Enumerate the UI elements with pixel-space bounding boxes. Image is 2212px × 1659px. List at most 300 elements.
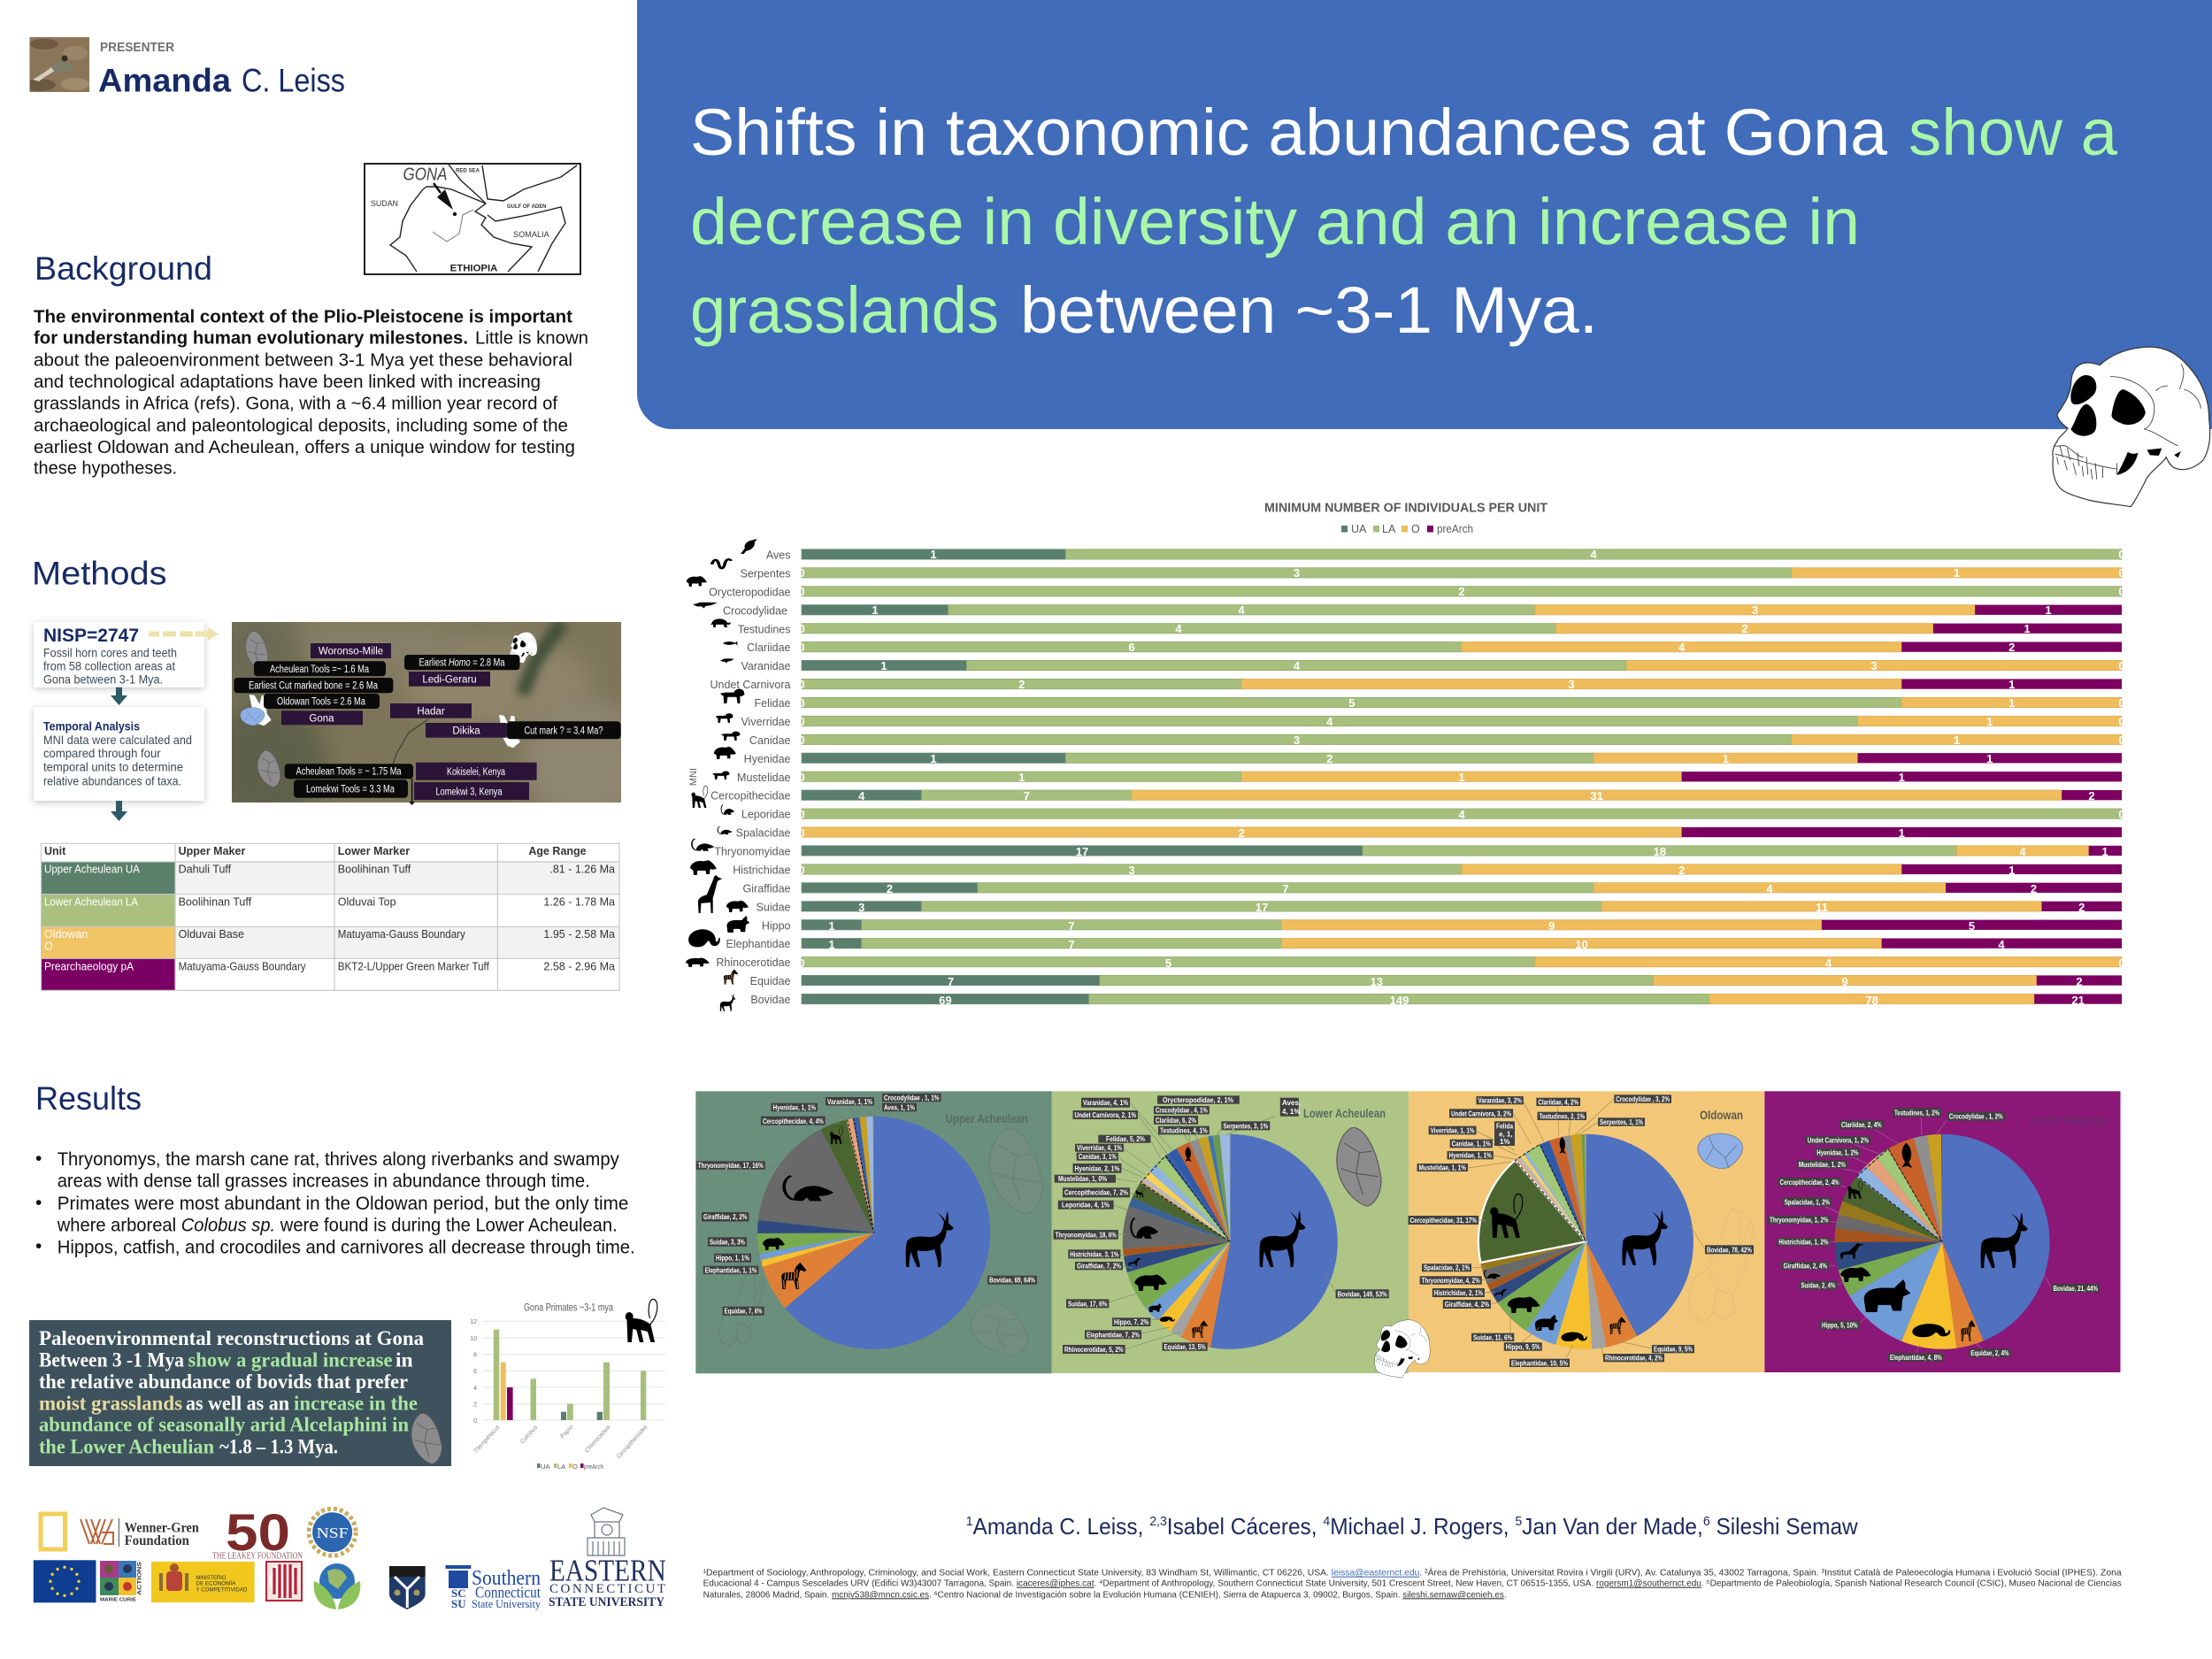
data labels: Crocodylidae , 1, 2%	[1949, 1113, 2003, 1121]
logo: Leakey Foundation 50: 50	[226, 1504, 290, 1562]
callout: paleoenvironmental reconstructions: the relative abundance of bovids that prefer	[39, 1371, 408, 1393]
table rows: Boolihinan Tuff	[338, 864, 411, 876]
table header: Lower Marker	[338, 845, 410, 857]
heading: Results: Results	[35, 1080, 142, 1117]
data labels: Elephantidae, 1, 1%	[705, 1267, 757, 1274]
bar chart: Gona primates: 4	[473, 1386, 477, 1392]
bar: Viverridae: 0	[2118, 715, 2125, 728]
axis label MNI: MNI	[688, 768, 699, 786]
bar: Spalacidae: 1	[1899, 826, 1905, 840]
logo: Leakey Foundation 50	[212, 1504, 303, 1562]
background text: archaeological and paleontological deposits, including some of the	[34, 416, 568, 435]
site and date labels	[234, 643, 621, 800]
bar chart: Gona primates: 12	[470, 1319, 477, 1325]
pie slices	[1888, 1188, 1996, 1295]
bar: Viverridae: 4	[1326, 715, 1333, 728]
logo: Marie Curie Actions: ACTIONS	[138, 1562, 143, 1595]
stone tool	[1337, 1127, 1381, 1206]
bar: Undet Carnivora: 0	[798, 678, 805, 691]
bar: Undet Carnivora: 2	[1018, 678, 1025, 691]
card: temporal analysis: compared through four	[43, 746, 161, 760]
site and date labels: Cut mark ? = 3.4 Ma?	[524, 726, 603, 736]
table rows: Lower Acheulean LA	[44, 895, 139, 908]
bar: Undet Carnivora	[710, 678, 2122, 691]
affiliations: ¹Department of Sociology, Anthropology, Criminology, and Social Work, Eastern Connecticut State University, 83 Windham St, Willimantic, CT 06226, USA. leissa@easternct.edu. ²Área de Prehistòria, Universitat Rovira i Virgili (URV), Av. Catalunya 35, 43002 Tarragona, Spain. ³Institut Català de Paleoecologia Humana i Evolució Social (IPHES). Zona	[703, 1567, 2122, 1578]
data labels: Elephantidae, 4, 8%	[1890, 1354, 1942, 1362]
presenter block: PRESENTER	[100, 40, 174, 55]
card: temporal analysis: relative abundances of taxa.	[43, 773, 181, 787]
data labels: Hyenidae, 1, 2%	[1816, 1148, 1858, 1156]
bar: Felidae: 0	[2118, 696, 2125, 710]
bar: Canidae: 0	[798, 733, 805, 747]
data labels: Aves,	[1282, 1099, 1301, 1107]
data labels: Bovidae, 21, 44%	[2053, 1285, 2098, 1293]
data labels: Felida	[1496, 1122, 1513, 1131]
icon: monkey	[626, 1299, 657, 1342]
data labels: Histrichidae, 1, 2%	[1778, 1239, 1829, 1247]
bar: Crocodylidae: Crocodylidae	[723, 604, 787, 617]
data labels: Bovidae, 69, 64%	[989, 1277, 1035, 1285]
bar: Suidae: 11	[1816, 901, 1828, 914]
bar: Mustelidae: 1	[1458, 771, 1465, 784]
bar: Giraffidae: 2	[887, 882, 893, 895]
bar: Bovidae: 78	[1865, 994, 1878, 1007]
icon: skull between pies	[1375, 1320, 1430, 1378]
bar: Suidae: 2	[2078, 901, 2085, 914]
bar: Canidae	[749, 733, 2125, 747]
data labels: Canidae, 3, 1%	[1079, 1153, 1117, 1161]
site and date labels: Acheulean Tools = ~ 1.75 Ma	[296, 767, 402, 778]
results bullet list: where arboreal Colobus sp. were found is during the Lower Acheulean.	[57, 1216, 618, 1236]
bar: Equidae: 9	[1841, 975, 1848, 988]
card: temporal analysis	[34, 707, 204, 801]
map of Ethiopia showing Gona: GONA	[403, 165, 448, 185]
map of Ethiopia showing Gona: RED SEA	[456, 168, 480, 174]
bar: Orycteropodidae	[709, 585, 2125, 598]
data labels: Giraffidae, 4, 2%	[1445, 1301, 1489, 1309]
pie icons	[1840, 1143, 2028, 1341]
data labels: 4, 1%	[1282, 1108, 1300, 1116]
bar: Rhinocerotidae: 4	[1825, 956, 1832, 970]
bar: Testudines: 4	[1175, 622, 1182, 635]
card: NISP: NISP=2747	[43, 626, 139, 646]
data labels: Cercopithecidae, 31, 17%	[1410, 1217, 1477, 1225]
bar: Equidae: 7	[948, 975, 954, 988]
heading: Background: Background	[35, 250, 212, 287]
bar: Hyenidae: 1	[1723, 752, 1729, 765]
data labels: Bovidae, 78, 42%	[1707, 1246, 1752, 1254]
results bullet list: •	[35, 1236, 42, 1256]
bar: Rhinocerotidae: 0	[2118, 956, 2125, 970]
data labels: Hyenidae, 2, 1%	[1074, 1164, 1119, 1172]
logo: Ministerio de Economia: MINISTERIO	[196, 1575, 226, 1581]
pie slices	[1532, 1188, 1640, 1295]
pie icons	[1484, 1137, 1668, 1341]
stone tools and bones on map	[240, 631, 537, 787]
data labels: Hippo, 5, 10%	[1822, 1322, 1858, 1330]
panel: Oldowan pie	[1409, 1091, 1764, 1372]
logo: shield	[389, 1566, 426, 1609]
data labels: Equidae, 9, 5%	[1654, 1346, 1693, 1354]
bar: Histrichidae: 0	[798, 864, 805, 877]
arrow: dashed to satellite map	[149, 627, 219, 641]
bar: Equidae	[750, 975, 2122, 988]
data labels: Rhinocerotidae, 5, 2%	[1064, 1346, 1124, 1354]
bar: Canidae: 3	[1294, 733, 1300, 747]
data labels: Undet Carnivora, 1, 2%	[1808, 1137, 1869, 1145]
decorative stone tools	[972, 1128, 1042, 1356]
data labels: Mustelidae, 1, 2%	[1799, 1161, 1846, 1169]
data labels: Mustelidae, 1, 0%	[1058, 1175, 1107, 1183]
data labels: Undet Carnivora, 2, 1%	[1074, 1111, 1136, 1119]
bar chart: Gona primates: Gona Primates ~3-1 mya	[524, 1302, 613, 1314]
data labels: Cercopithecidae, 4, 4%	[763, 1118, 824, 1125]
affiliations	[703, 1567, 2122, 1600]
results bullet list: Thryonomys, the marsh cane rat, thrives along riverbanks and swampy	[58, 1149, 619, 1170]
bar: Elephantidae	[726, 938, 2122, 951]
bar: Varanidae: Varanidae	[741, 660, 791, 672]
bar: Mustelidae	[737, 771, 2122, 784]
logo: National Geographic	[41, 1514, 65, 1549]
bar: Giraffidae: 4	[1766, 882, 1773, 895]
author list: Jan Van der Made,	[1522, 1513, 1703, 1540]
card: temporal analysis: MNI data were calculated and	[43, 733, 192, 747]
data labels	[696, 1094, 1037, 1316]
bar: Histrichidae: 1	[2008, 864, 2015, 877]
results bullet list: Primates were most abundant in the Oldowan period, but the only time	[58, 1194, 628, 1214]
bar: Leporidae	[741, 808, 2125, 821]
table header: Unit	[44, 845, 66, 857]
bar: Mustelidae: Mustelidae	[737, 772, 791, 784]
bar: Leporidae: 0	[798, 808, 805, 821]
site and date labels: Earliest Homo = 2.8 Ma	[419, 658, 505, 669]
results bullet list: Hippos, catfish, and crocodiles and carnivores all decrease through time.	[58, 1238, 635, 1258]
bar: Suidae	[757, 901, 2122, 914]
data labels: Histrichidae, 2, 1%	[1434, 1289, 1483, 1297]
card: temporal analysis: Temporal Analysis	[43, 719, 140, 733]
title line 2: decrease in diversity and an increase in	[690, 185, 1860, 258]
panel: Upper Acheulean pie	[695, 1091, 1051, 1373]
site and date labels: Gona	[309, 713, 334, 724]
background text: for understanding human evolutionary milestones.	[34, 329, 468, 349]
bar: Viverridae	[741, 715, 2125, 728]
logo: NSF	[309, 1509, 356, 1555]
bar: Varanidae: 0	[2118, 659, 2125, 672]
data labels: Suidae, 11, 6%	[1473, 1333, 1512, 1341]
table rows: Olduvai Base	[179, 928, 244, 941]
results bullet list	[35, 1148, 635, 1258]
primate chart legend: preArch	[584, 1463, 603, 1471]
callout: paleoenvironmental reconstructions: in	[396, 1348, 413, 1371]
bar: Varanidae	[741, 659, 2125, 672]
bar: Elephantidae: 7	[1068, 938, 1075, 951]
logo: Wenner-Gren Foundation: Wenner-Gren	[125, 1521, 199, 1536]
bar: Spalacidae	[736, 826, 2122, 840]
background text	[34, 307, 588, 479]
decorative bones and stone	[1688, 1133, 1754, 1322]
site and date labels: Woronso-Mille	[319, 646, 383, 657]
bar: Suidae: 3	[858, 901, 864, 914]
logo: Eastern Connecticut State University: STATE UNIVERSITY	[549, 1595, 664, 1609]
bar: Bovidae: 21	[2071, 994, 2085, 1007]
site and date labels: Lomekwi Tools = 3.3 Ma	[306, 784, 395, 795]
author list: Sileshi Semaw	[1710, 1513, 1858, 1540]
bar: Aves	[766, 548, 2125, 561]
results bullet list: •	[35, 1148, 42, 1169]
logo: NSF: NSF	[317, 1525, 349, 1541]
site and date labels: Kokiselei, Kenya	[447, 767, 505, 778]
bar: Equidae: Equidae	[750, 975, 791, 987]
logo: Eastern Connecticut State University: CONNECTICUT	[549, 1582, 665, 1596]
logo: Generalitat de Catalunya	[266, 1562, 302, 1601]
table header: Upper Maker	[179, 845, 245, 857]
background text: these hypotheses.	[34, 459, 177, 479]
data labels: Varanidae, 4, 1%	[1083, 1099, 1128, 1107]
bar: Undet Carnivora: 3	[1568, 678, 1575, 691]
bar: Varanidae: 3	[1870, 659, 1878, 672]
bar: Suidae: Suidae	[757, 901, 791, 913]
pie icons	[1128, 1147, 1306, 1338]
bar chart: Gona primates: 10	[470, 1336, 477, 1342]
background text: Little is known	[475, 329, 588, 349]
bar: Felidae	[754, 696, 2125, 710]
logo: Eastern Connecticut State University: EASTERN	[549, 1554, 666, 1588]
data labels: Bovidae, 149, 53%	[1338, 1290, 1387, 1298]
logo: Southern Connecticut State University: SC	[451, 1586, 466, 1600]
pie slices	[816, 1175, 932, 1291]
bar: Canidae: Canidae	[749, 734, 791, 747]
author list: Michael J. Rogers,	[1330, 1513, 1515, 1540]
logo: globe and leaves	[314, 1563, 360, 1609]
bar: Crocodylidae: 1	[872, 603, 879, 617]
data labels: Cercopithecidae, 7, 2%	[1064, 1189, 1128, 1197]
bar: Histrichidae: 2	[1678, 864, 1685, 877]
table rows: 1.26 - 1.78 Ma	[543, 895, 615, 908]
author list: 4	[1323, 1514, 1330, 1529]
data labels: Suidae, 3, 3%	[710, 1239, 745, 1246]
data labels: Hyenidae, 1, 1%	[1449, 1152, 1492, 1160]
bar: Crocodylidae: 3	[1752, 603, 1758, 617]
logo: Southern Connecticut State University: Southern	[472, 1567, 541, 1590]
results bullet list: •	[35, 1193, 42, 1213]
data labels: Crocodylidae , 3, 2%	[1616, 1095, 1670, 1103]
data labels: Hippo, 1, 1%	[716, 1255, 749, 1263]
primate chart legend	[537, 1463, 603, 1471]
author list: 2,3	[1149, 1514, 1167, 1529]
bar: Elephantidae: Elephantidae	[726, 938, 791, 950]
presenter photo	[24, 37, 89, 92]
logo: Southern Connecticut State University: State University	[472, 1597, 541, 1610]
card: NISP: from 58 collection areas at	[43, 659, 175, 673]
taxon axis labels: Theropithecus	[473, 1424, 502, 1455]
bar: Aves: 0	[2118, 548, 2125, 561]
data labels: Crocodylidae , 4, 1%	[1156, 1107, 1208, 1115]
bar: Cercopithecidae: 7	[1024, 789, 1030, 803]
bar: Leporidae: 0	[2118, 808, 2125, 821]
bar: Histrichidae: 3	[1128, 864, 1135, 877]
bar: Suidae: 17	[1256, 901, 1268, 914]
chart title: MINIMUM NUMBER OF INDIVIDUALS PER UNIT	[1264, 502, 1548, 516]
bar: Hippo	[762, 919, 2122, 933]
map of Ethiopia showing Gona	[365, 164, 580, 274]
callout: paleoenvironmental reconstructions: abundance of seasonally arid Alcelaphini in	[39, 1413, 409, 1435]
chart legend	[1341, 523, 1473, 535]
bar: Serpentes: 0	[798, 566, 805, 580]
bar: Giraffidae: 7	[1282, 882, 1289, 895]
data labels: Equidae, 7, 6%	[725, 1308, 763, 1316]
site and date labels: Dikika	[452, 726, 480, 736]
data labels: Undet Carnivora, 3, 2%	[1451, 1110, 1511, 1118]
bar: Serpentes: 3	[1294, 566, 1300, 580]
chart legend: LA	[1382, 523, 1396, 535]
author list: Isabel Cáceres,	[1167, 1513, 1323, 1540]
bar: Crocodylidae: 4	[1238, 603, 1245, 617]
data labels: Testudines, 1, 2%	[1894, 1109, 1939, 1117]
bar: Thryonomyidae: 17	[1076, 845, 1088, 858]
data labels: Histrichidae, 3, 1%	[1070, 1250, 1118, 1258]
bar: Giraffidae: 2	[2031, 882, 2037, 895]
bar: Clariidae: Clariidae	[747, 641, 791, 654]
chart legend: O	[1411, 523, 1420, 535]
bar: Mustelidae: 1	[1899, 771, 1905, 784]
logo: Southern Connecticut State University: Connecticut	[475, 1584, 541, 1601]
data labels: Clariidae, 2, 4%	[1841, 1121, 1882, 1129]
bar: Testudines: 0	[798, 622, 805, 635]
sponsor logos	[34, 1504, 666, 1610]
primate bars	[494, 1330, 646, 1420]
data labels: Giraffidae, 7, 2%	[1077, 1263, 1121, 1271]
table rows: Matuyama-Gauss Boundary	[179, 961, 306, 973]
primate chart legend: O	[572, 1463, 578, 1471]
bar: Cercopithecidae: 4	[858, 789, 865, 803]
data labels: Thryonomyidae, 18, 6%	[1056, 1231, 1117, 1239]
presenter name	[98, 63, 345, 99]
heading: Methods: Methods	[32, 556, 166, 592]
data labels: Thryonomyidae, 17, 16%	[698, 1162, 764, 1170]
data labels: Serpentes, 1, 1%	[1600, 1118, 1643, 1126]
background text: grasslands in Africa (refs). Gona, with a ~6.4 million year record of	[34, 395, 557, 414]
bar: Thryonomyidae: Thryonomyidae	[714, 846, 791, 858]
callout: paleoenvironmental reconstructions: increase in the	[294, 1392, 418, 1414]
title line 3: between ~3-1 Mya.	[1020, 273, 1598, 347]
table rows: Boolihinan Tuff	[179, 895, 252, 908]
bar: Spalacidae: Spalacidae	[736, 827, 791, 840]
bar chart: Gona primates: 6	[473, 1369, 477, 1375]
bar chart: Gona primates	[470, 1299, 665, 1471]
logo: Ministerio de Economia	[151, 1562, 255, 1602]
table: stratigraphic units	[41, 843, 619, 990]
bar: Equidae: 2	[2076, 975, 2083, 988]
card: temporal analysis: temporal units to determine	[43, 760, 183, 774]
data labels: Aves, 1, 1%	[884, 1104, 915, 1111]
bar: Serpentes: 1	[1954, 566, 1960, 580]
card: NISP: Gona between 3-1 Mya.	[43, 672, 163, 687]
pie slices	[1177, 1188, 1284, 1295]
background text: The environmental context of the Plio-Pleistocene is important	[34, 307, 572, 326]
bar: Undet Carnivora: 1	[2008, 678, 2015, 691]
bar: Mustelidae: 0	[798, 771, 805, 784]
logo: Leakey Foundation 50: THE LEAKEY FOUNDATION	[212, 1552, 303, 1562]
data labels: Varanidae, 3, 2%	[1478, 1097, 1522, 1105]
site and date labels: Ledi-Geraru	[422, 674, 477, 685]
site and date labels: Earliest Cut marked bone = 2.6 Ma	[249, 681, 378, 692]
data labels: e, 1,	[1499, 1131, 1513, 1138]
bar: Bovidae: 69	[939, 994, 952, 1007]
bar: Hyenidae: 1	[1986, 752, 1993, 765]
bar: Crocodylidae	[723, 603, 2122, 617]
bar: Cercopithecidae: 31	[1590, 789, 1603, 803]
bar: Histrichidae	[733, 864, 2122, 877]
results bullet list: areas with dense tall grasses increases in abundance through time.	[58, 1171, 590, 1192]
bar: Thryonomyidae: 4	[2019, 845, 2026, 858]
data labels: Elephantidae, 10, 5%	[1511, 1359, 1568, 1367]
bar: Clariidae: 2	[2008, 641, 2015, 654]
taxon silhouette icons	[686, 539, 757, 1011]
logo: Wenner-Gren Foundation	[81, 1518, 199, 1548]
bar: Aves: Aves	[766, 549, 791, 561]
bar: Orycteropodidae: 0	[2118, 585, 2125, 598]
bar: Hyenidae: 2	[1326, 752, 1333, 765]
logo: Ministerio de Economia: Y COMPETITIVIDAD	[196, 1586, 248, 1593]
data labels: Spalacidae, 1, 2%	[1785, 1198, 1830, 1206]
bar: Hyenidae	[744, 752, 2122, 765]
table rows: .81 - 1.26 Ma	[549, 864, 615, 876]
data labels: Viverridae, 4, 1%	[1077, 1144, 1122, 1152]
title line 3	[690, 273, 1598, 347]
bar chart: Gona primates: 8	[473, 1352, 477, 1359]
arrow: down to temporal analysis	[111, 687, 127, 705]
bar: Bovidae: 149	[1390, 994, 1409, 1007]
table rows	[44, 864, 615, 973]
bar: Clariidae: 4	[1678, 641, 1686, 654]
data labels	[1409, 1094, 1754, 1367]
callout: paleoenvironmental reconstructions: Paleoenvironmental reconstructions at Gona	[39, 1327, 424, 1349]
bar: Testudines: 2	[1741, 622, 1748, 635]
site and date labels: Lomekwi 3, Kenya	[435, 787, 503, 798]
data labels: Varanidae, 1, 1%	[827, 1098, 872, 1106]
presenter block	[30, 37, 344, 92]
site and date labels: Oldowan Tools = 2.6 Ma	[277, 696, 365, 707]
pie icons	[763, 1127, 954, 1289]
bar: Undet Carnivora: Undet Carnivora	[710, 679, 791, 691]
logo: Eastern Connecticut State University	[549, 1508, 666, 1609]
background text: about the paleoenvironment between 3-1 Mya yet these behavioral	[34, 351, 572, 371]
affiliations: Educacional 4 - Campus Sescelades URV (Edifici W3)43007 Tarragona, Spain. icaceres@iphes.cat. ⁴Department of Anthropology, Southern Connecticut State University, 501 Crescent Street, New Haven, CT 06515-1355, USA. rogersm1@southernct.edu. ⁵Departmento de Paleobiología, Spanish National Research Council (CSIC), Museo Nacional de Ciencias	[703, 1578, 2122, 1589]
taxon axis labels: Papio	[559, 1425, 575, 1440]
satellite map with site labels	[232, 622, 621, 805]
data labels: Elephantidae, 7, 2%	[1087, 1331, 1140, 1339]
bar: Clariidae: 0	[798, 641, 805, 654]
callout: paleoenvironmental reconstructions: show a gradual increase	[188, 1348, 393, 1371]
data labels: Testudines, 4, 1%	[1160, 1127, 1208, 1134]
callout: paleoenvironmental reconstructions: as well as an	[186, 1392, 289, 1414]
data labels: Cercopithecidae, 2, 4%	[1780, 1179, 1839, 1187]
title line 3: grasslands	[690, 273, 999, 347]
table rows: 2.58 - 2.96 Ma	[543, 961, 615, 973]
bar: Felidae: Felidae	[754, 697, 791, 710]
bar: Elephantidae: 1	[828, 938, 835, 951]
bar: Canidae: 1	[1954, 733, 1960, 747]
map of Ethiopia showing Gona: GULF OF ADEN	[507, 204, 547, 210]
callout: paleoenvironmental reconstructions	[29, 1320, 451, 1466]
bar: Equidae: 13	[1371, 975, 1383, 988]
affiliations: Naturales, 28006 Madrid, Spain. mcnjv538@mncn.csic.es. ⁶Centro Nacional de Investigación sobre la Evolución Humana (CENIEH), Sierra de Atapuerca 3, 09002, Burgos, Spain. sileshi.semaw@cenieh.es.	[703, 1589, 1507, 1600]
presenter name: C. Leiss	[242, 63, 345, 99]
bar: Viverridae: Viverridae	[741, 716, 791, 728]
primate chart legend: LA	[557, 1463, 565, 1471]
table rows: Prearchaeology pA	[44, 961, 134, 973]
panel: Prearchaeology pie	[1764, 1091, 2120, 1372]
